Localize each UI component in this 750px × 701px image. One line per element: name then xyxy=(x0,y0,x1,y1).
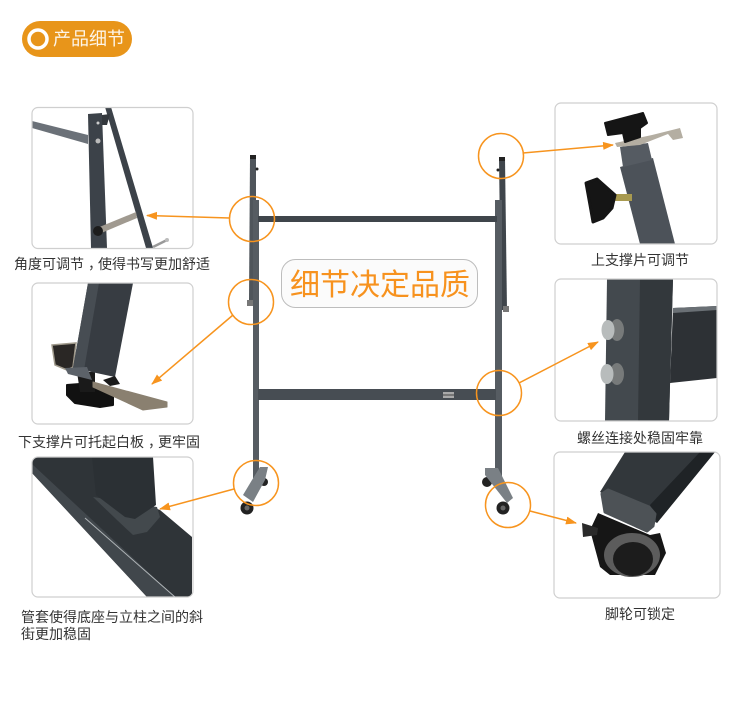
panel border: screw connection xyxy=(555,279,717,421)
panel border: angle adjustment xyxy=(32,108,193,248)
panel border: tube sleeve xyxy=(32,457,193,597)
arrow: upper support plate callout xyxy=(478,134,613,178)
caption: locking caster: 脚轮可锁定 xyxy=(605,606,675,622)
arrow: tube sleeve callout xyxy=(160,460,278,509)
arrow: locking caster callout xyxy=(486,482,576,528)
main product illustration: whiteboard stand frame xyxy=(240,155,513,514)
arrow: angle adjustment callout xyxy=(147,196,274,242)
panel: lower support plate photo xyxy=(52,283,167,410)
arrow: screw connection callout xyxy=(476,342,598,416)
caption: screw connection: 螺丝连接处稳固牢靠 xyxy=(577,430,703,446)
panel: tube sleeve photo xyxy=(32,457,192,597)
callout label: 细节决定品质: 细节决定品质 xyxy=(290,269,470,302)
caption: tube sleeve: 管套使得底座与立柱之间的斜 xyxy=(21,609,203,625)
section badge: 产品细节 xyxy=(22,21,132,57)
panel: screw connection photo xyxy=(600,279,717,421)
panel border: lower support plate xyxy=(32,283,193,424)
caption: tube sleeve second line: 街更加稳固 xyxy=(21,626,91,642)
panel: locking caster photo xyxy=(582,452,715,577)
caption: angle adjustment: 角度可调节 ，使得书写更加舒适 xyxy=(14,256,210,272)
callout label: 细节决定品质 xyxy=(282,260,478,308)
panel border: upper support plate xyxy=(555,103,717,244)
panel: angle adjustment photo xyxy=(32,107,169,248)
panel border: locking caster xyxy=(554,452,720,598)
caption: lower support plate: 下支撑片可托起白板 ，更牢固 xyxy=(18,434,200,450)
arrow: lower support plate callout xyxy=(152,280,274,384)
panel: upper support plate photo xyxy=(586,113,683,244)
section badge: 产品细节: 产品细节 xyxy=(53,29,125,49)
caption: upper support plate: 上支撑片可调节 xyxy=(591,252,689,268)
